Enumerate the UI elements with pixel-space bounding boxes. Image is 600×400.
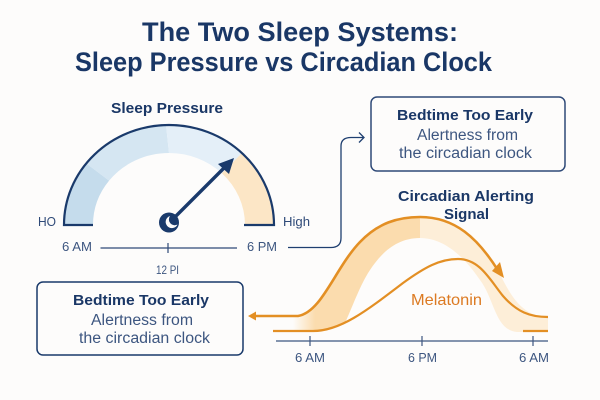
callout: top right: Alertness from	[417, 127, 518, 144]
sleep pressure time axis	[62, 239, 277, 277]
callout: top right	[371, 97, 565, 171]
band: rising shade	[293, 217, 420, 332]
needle	[172, 158, 234, 220]
title: The Two Sleep Systems:	[142, 17, 458, 47]
12 PM clipped label: 12 PI	[156, 263, 179, 277]
gauge low label: HO	[38, 214, 56, 229]
circadian heading	[398, 188, 534, 223]
band: falling shade	[420, 217, 548, 332]
axis lines	[100, 243, 237, 253]
gauge segment: high	[222, 153, 274, 225]
callout: bottom left	[37, 282, 243, 355]
icon: moon hub	[159, 212, 179, 232]
6 PM label: 6 PM	[247, 239, 277, 254]
alerting curve	[272, 217, 499, 316]
gauge segment: rising	[166, 125, 242, 173]
gauge outline	[64, 125, 274, 225]
axis labels: 6 AM	[295, 350, 325, 365]
arrow: gauge to top callout	[288, 132, 364, 248]
circadian heading: Circadian Alerting	[398, 188, 534, 205]
arrow: chart to bottom callout	[248, 312, 272, 320]
circadian chart	[272, 217, 549, 365]
gauge segment: medium	[86, 125, 169, 181]
gauge high label: High	[283, 214, 310, 229]
title	[75, 17, 492, 77]
sleep pressure gauge	[64, 125, 274, 232]
callout: bottom left: the circadian clock	[79, 330, 210, 347]
arrowhead	[492, 262, 504, 278]
melatonin curve	[273, 259, 548, 331]
circadian heading: Signal	[444, 206, 489, 223]
melatonin tail	[523, 330, 548, 332]
axis labels	[295, 350, 549, 365]
6 AM label: 6 AM	[62, 239, 92, 254]
gauge heading: Sleep Pressure	[111, 100, 223, 117]
axis labels: 6 AM	[519, 350, 549, 365]
callout: bottom left: Bedtime Too Early	[73, 292, 210, 309]
melatonin label: Melatonin	[411, 292, 482, 309]
axis labels: 6 PM	[408, 350, 437, 365]
chart axis	[276, 336, 548, 346]
gauge segment: low	[64, 163, 109, 225]
callout: bottom left: Alertness from	[91, 312, 193, 329]
title: Sleep Pressure vs Circadian Clock	[75, 47, 492, 77]
callout: top right: Bedtime Too Early	[397, 107, 534, 124]
callout: top right: the circadian clock	[399, 145, 532, 162]
